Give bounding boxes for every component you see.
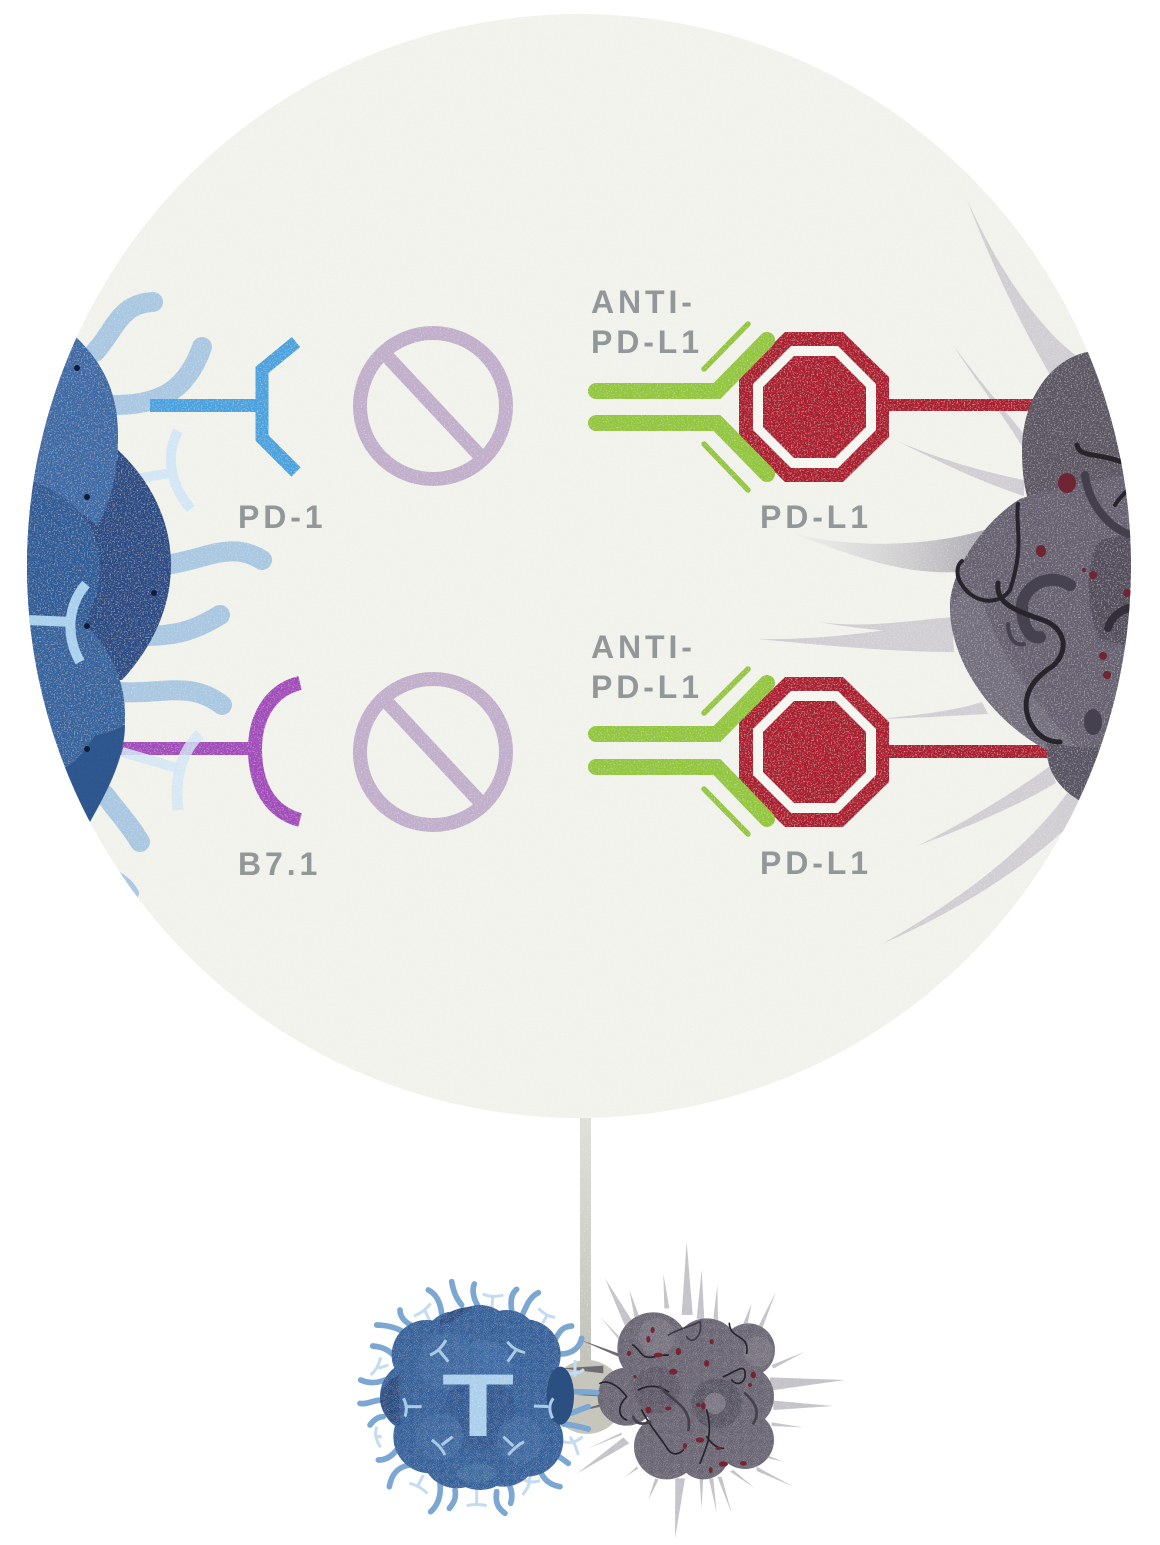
- blue Y receptor on cell: [26, 584, 86, 662]
- middle lobe: [20, 450, 171, 680]
- top anti-PD-L1 antibody: [596, 324, 767, 490]
- top PD-L1 stop octagon: [739, 332, 889, 482]
- bottom anti-PD-L1 antibody: [596, 669, 767, 834]
- B7.1 receptor: [120, 683, 300, 820]
- tumor cell (magnified): [950, 352, 1131, 800]
- small tumor dark spikes over connector: [562, 1338, 618, 1415]
- lower lobe shade: [62, 725, 125, 822]
- magnified circle background: [27, 14, 1131, 1118]
- ligand stem: top PD-L1 to tumor: [888, 399, 1048, 411]
- small T cell dark contact lens: [547, 1367, 574, 1425]
- tumor cell spikes: [758, 197, 1088, 944]
- label: PD-1: PD-1: [238, 499, 327, 535]
- label: B7.1: B7.1: [238, 846, 321, 882]
- tumor strands: [957, 445, 1140, 742]
- B7.1 arc: [255, 683, 300, 820]
- tumor lobes: [950, 352, 1131, 800]
- label: top ANTI-PD-L1: ANTI-: [591, 284, 696, 320]
- B7.1 stem: [120, 742, 255, 755]
- cell pores: [74, 365, 157, 752]
- label: bottom ANTI-PD-L1: ANTI-: [591, 629, 696, 665]
- T letter mark: T: [442, 1356, 514, 1456]
- small tumor spikes: [577, 1242, 845, 1538]
- small tumor cell: [562, 1242, 845, 1538]
- small tumor strands: [600, 1322, 757, 1463]
- connector stem from magnified circle: [580, 1118, 591, 1368]
- left lobe: [27, 482, 100, 636]
- label: bottom ANTI-PD-L1: PD-L1: [591, 669, 703, 705]
- tumor red spots: [1036, 473, 1131, 679]
- small tumor red spots: [627, 1327, 756, 1473]
- small tumor lobes: [598, 1312, 775, 1479]
- small T cell: [360, 1282, 597, 1513]
- ligand stem: bottom PD-L1 to tumor: [888, 745, 1058, 758]
- PD-1 receptor: [150, 342, 296, 472]
- tumor dark blob: [1084, 709, 1102, 735]
- magnified view contents: [20, 197, 1150, 944]
- label: top ANTI-PD-L1: PD-L1: [591, 324, 703, 360]
- blocked sign: B7.1 pathway: [360, 679, 506, 825]
- upper lobe: [32, 338, 118, 526]
- small T cell light receptors: [371, 1294, 584, 1506]
- small T cell cilia: [360, 1282, 597, 1513]
- blocked sign: PD-1 pathway: [360, 333, 506, 479]
- small T cell lobes: [380, 1305, 563, 1490]
- PD-1 fork: [262, 342, 296, 472]
- label: top PD-L1: PD-L1: [760, 499, 872, 535]
- T cell cilia (magnified): [95, 302, 262, 893]
- bottom PD-L1 stop octagon: [739, 677, 889, 827]
- lower lobe: [20, 620, 125, 822]
- small T cell inner receptors: [403, 1340, 553, 1455]
- PD-1 stem: [150, 399, 265, 412]
- T cell lobes (magnified): [20, 337, 171, 822]
- light Y receptors on T cell: [112, 431, 200, 810]
- connector spot at cell junction: [550, 1360, 624, 1434]
- label: bottom PD-L1: PD-L1: [760, 845, 872, 881]
